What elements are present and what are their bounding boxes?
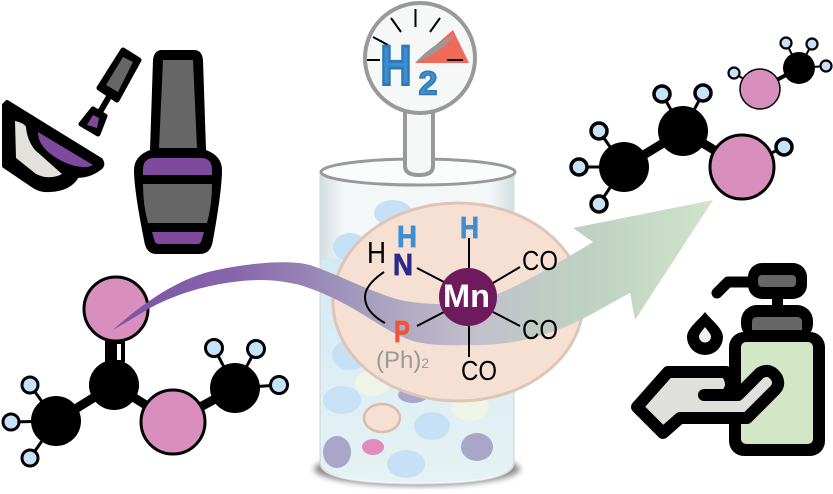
oxygen atom: [710, 135, 774, 199]
beaker shadow: [314, 452, 520, 486]
bonds: [734, 43, 826, 89]
molecule: ester: [3, 277, 288, 466]
beaker rim: [321, 159, 515, 185]
reaction arrow: [113, 200, 713, 345]
icon: nail polish bottle: [134, 50, 222, 254]
catalyst ellipse: [333, 203, 583, 401]
soap nozzle: [717, 282, 750, 293]
manganese centre: [439, 268, 497, 326]
hand: [637, 371, 778, 433]
soap drop: [687, 312, 723, 355]
label H blue hydride: H: [460, 210, 479, 245]
catalyst structure: [365, 210, 558, 386]
carbon atom: [783, 52, 815, 84]
oxygen atom: [740, 69, 780, 109]
bonds: [365, 238, 520, 357]
beaker glass body: [320, 172, 514, 484]
gauge needle: [415, 35, 455, 63]
molecule: methanol: [728, 38, 832, 109]
hydrogen atoms: [3, 340, 288, 466]
bonds: [579, 93, 784, 204]
label Mn: Mn: [443, 278, 490, 314]
bonds: [11, 348, 279, 458]
gauge ticks: [367, 9, 463, 60]
gauge red zone: [415, 30, 469, 63]
icon: nail polish brush: [81, 50, 139, 134]
carbon atoms: [31, 360, 260, 446]
gauge: hydrogen pressure: [365, 3, 475, 175]
label H blue amine: H: [397, 219, 417, 254]
icon: soap dispenser and hand: [637, 263, 825, 456]
label CO lower right: CO: [522, 314, 558, 345]
soap bottle shoulder: [741, 305, 813, 340]
H2 label: [380, 34, 438, 102]
H2 label: 2: [418, 64, 438, 102]
molecule: ethanol: [571, 85, 792, 212]
icon: painted fingernail: [4, 102, 102, 190]
H2 label: H: [380, 34, 412, 96]
label N: N: [393, 247, 413, 282]
hydrogen atoms: [571, 85, 792, 212]
double bond: [105, 338, 125, 362]
gauge dial: [365, 3, 475, 113]
gauge stem: [405, 105, 433, 175]
label (Ph)2: (Ph)2: [376, 347, 429, 374]
label CO upper right: CO: [522, 245, 558, 276]
bubbles: [323, 200, 493, 478]
label CO bottom: CO: [461, 355, 497, 386]
oxygen atoms: [84, 277, 205, 454]
label P: P: [394, 314, 410, 349]
soap bottle body: [729, 332, 825, 456]
beaker liquid: [321, 255, 513, 482]
beaker: [314, 159, 520, 486]
hydrogen atoms: [728, 38, 832, 78]
soap pump stem: [772, 297, 783, 308]
label H black: H: [367, 235, 386, 270]
soap pump head: [748, 263, 807, 299]
carbon atoms: [599, 106, 708, 192]
